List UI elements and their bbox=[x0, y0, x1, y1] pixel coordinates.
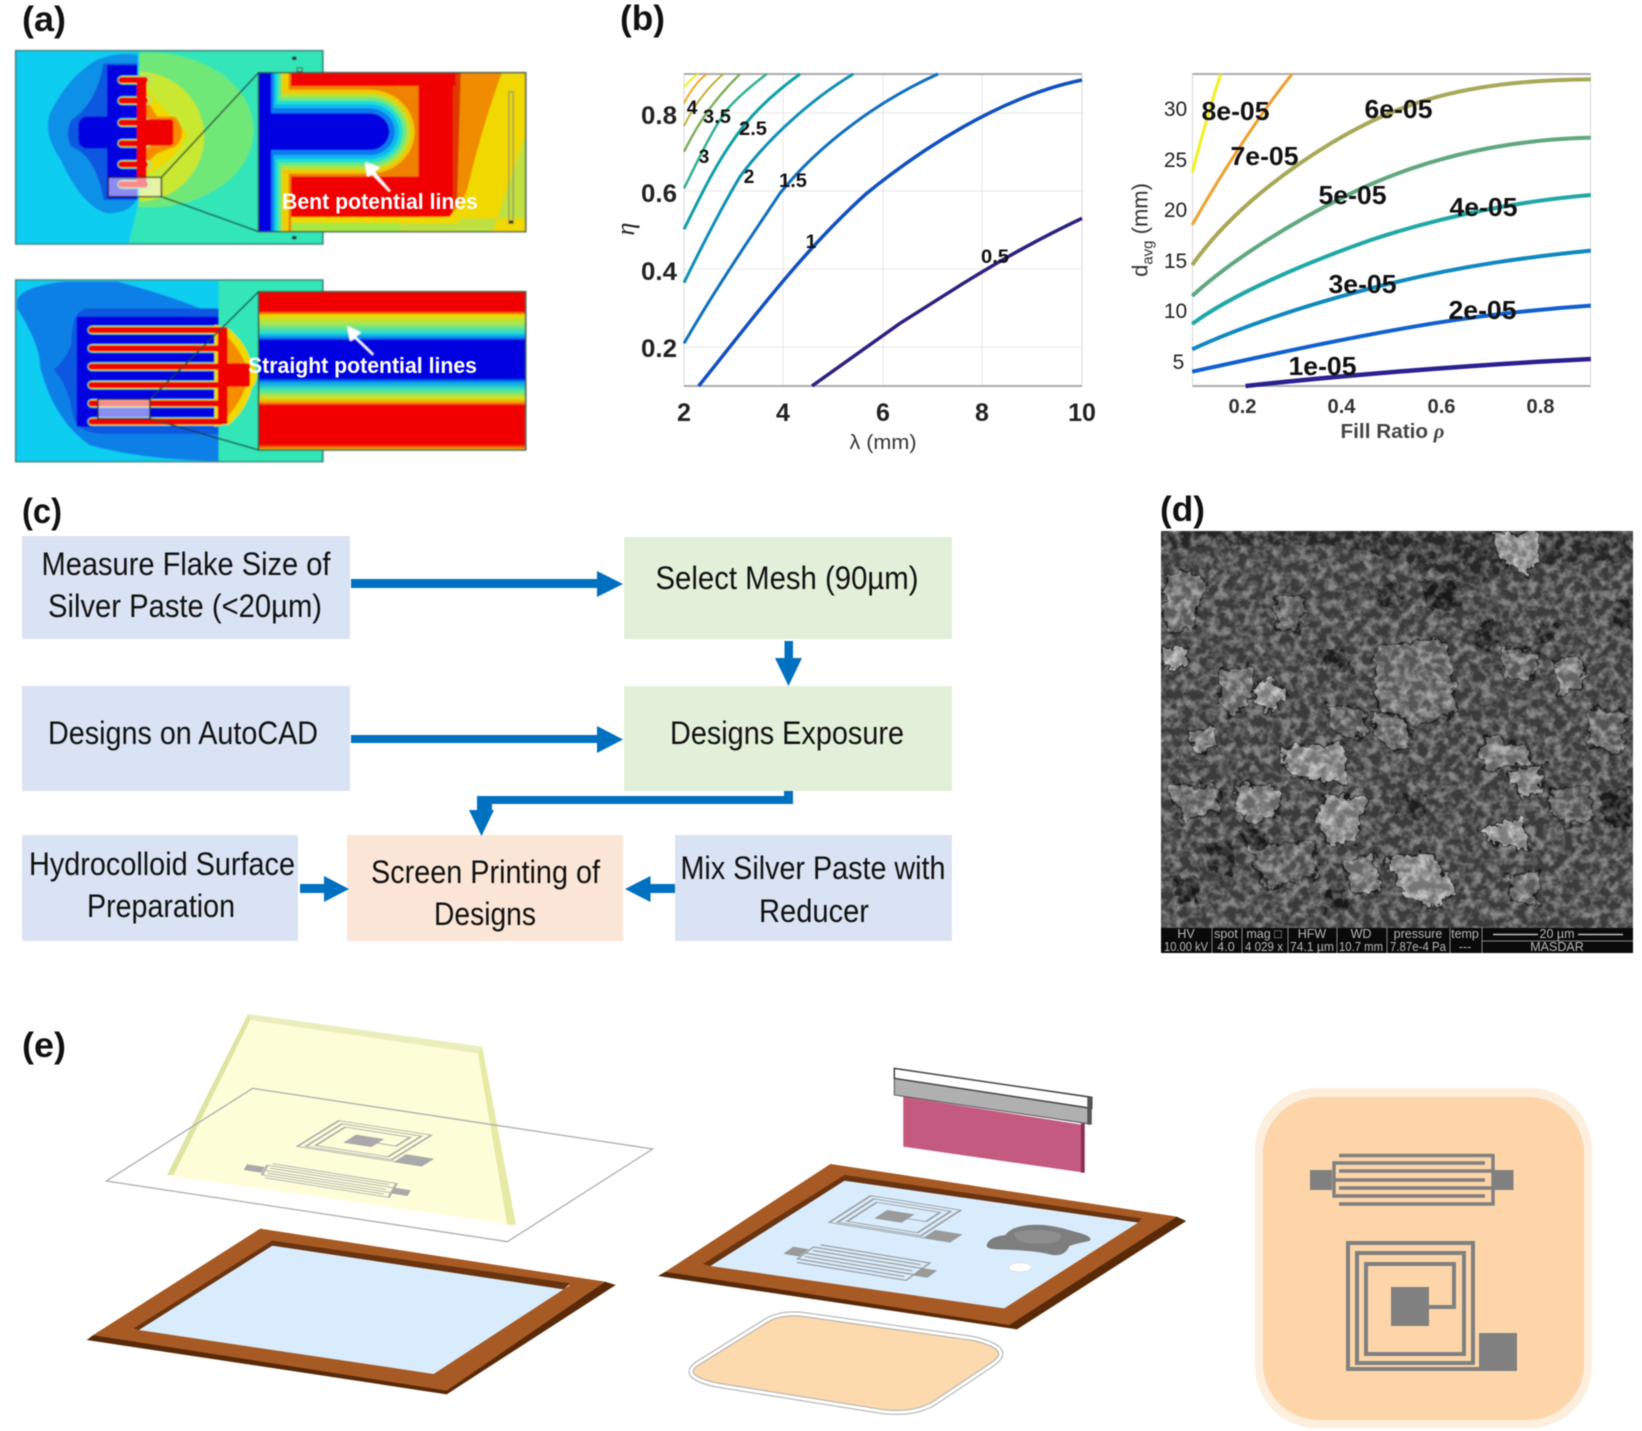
y tick labels: 15 bbox=[1164, 250, 1187, 273]
x tick labels: 0.8 bbox=[1526, 396, 1554, 418]
SEM info bar: 7.87e-4 Pa bbox=[1390, 940, 1446, 954]
transparent mask sheet bbox=[106, 1088, 653, 1242]
SEM info bar: HFW bbox=[1298, 927, 1326, 941]
box: measure flake size: Silver Paste (<20µm) bbox=[48, 588, 322, 624]
panel a label: (a) bbox=[22, 0, 66, 39]
y tick labels: 30 bbox=[1164, 98, 1187, 121]
box: designs on autocad: Designs on AutoCAD bbox=[48, 715, 318, 751]
design on mask: interdigitated bbox=[241, 1160, 413, 1200]
SEM info bar: --- bbox=[1459, 940, 1471, 954]
chart: d_avg vs fill ratio contour plot bbox=[1128, 74, 1591, 443]
illustration: screen frame with designs and paste bbox=[658, 1164, 1186, 1329]
x tick labels: 10 bbox=[1068, 399, 1096, 427]
callout: straight potential lines: Straight potential lines bbox=[248, 353, 477, 378]
contour labels: 3e-05 bbox=[1328, 269, 1396, 299]
y tick labels: 10 bbox=[1164, 300, 1187, 323]
chart: eta vs lambda contour plot bbox=[611, 74, 1096, 454]
contour labels: 5e-05 bbox=[1318, 180, 1386, 210]
arrow: autocad to exposure bbox=[351, 726, 623, 753]
silver paste blob bbox=[987, 1225, 1090, 1272]
contour labels: 1e-05 bbox=[1288, 351, 1356, 381]
SEM info bar: pressure bbox=[1394, 927, 1442, 941]
SEM info bar: 4 029 x bbox=[1245, 940, 1284, 954]
contour labels: 7e-05 bbox=[1230, 141, 1298, 171]
box: screen printing of designs: Designs bbox=[434, 896, 536, 932]
x tick labels: 0.6 bbox=[1428, 396, 1456, 418]
SEM info bar: 10.7 mm bbox=[1339, 940, 1383, 954]
SEM info bar: spot bbox=[1214, 927, 1238, 941]
top simulation main field bbox=[16, 51, 323, 244]
contour labels: 2 bbox=[744, 167, 754, 188]
SEM info bar: mag □ bbox=[1246, 927, 1282, 941]
SEM info bar bbox=[1161, 927, 1633, 954]
box: hydrocolloid surface preparation bbox=[22, 835, 298, 941]
x tick labels: 4 bbox=[776, 399, 790, 427]
box: screen printing of designs: Screen Printing of bbox=[371, 854, 600, 890]
y axis title: (mm) bbox=[1128, 183, 1152, 240]
light trapezoid bbox=[167, 1014, 516, 1225]
arrow: mesh to exposure bbox=[775, 641, 802, 686]
contour labels bbox=[687, 98, 1009, 268]
illustration: UV light exposure through mask bbox=[87, 1014, 653, 1394]
bottom inset field bbox=[259, 292, 526, 450]
panel c label: (c) bbox=[22, 492, 62, 531]
y tick labels: 25 bbox=[1164, 149, 1187, 172]
contour labels: 1.5 bbox=[779, 171, 807, 192]
x tick labels bbox=[677, 399, 1096, 427]
contour labels: 4e-05 bbox=[1450, 192, 1518, 222]
y tick labels: 0.2 bbox=[641, 335, 677, 363]
wooden frame with mesh bbox=[87, 1229, 616, 1394]
illustration: hydrocolloid substrate bbox=[691, 1314, 1001, 1412]
arrow: hydrocolloid to screen printing bbox=[300, 876, 349, 902]
highlight box bottom bbox=[98, 399, 150, 419]
callout: bent potential lines: Bent potential lines bbox=[282, 189, 478, 214]
y tick labels bbox=[1164, 98, 1187, 374]
x tick labels: 0.4 bbox=[1328, 396, 1356, 418]
illustration: printed sensor patch bbox=[1255, 1088, 1592, 1428]
contour labels: 2.5 bbox=[739, 119, 767, 140]
y axis title: d bbox=[1128, 265, 1152, 277]
contour labels: 3.5 bbox=[703, 107, 731, 128]
box: designs exposure: Designs Exposure bbox=[670, 715, 904, 751]
chart: eta vs lambda contour plot: λ (mm) bbox=[850, 432, 916, 454]
contour labels: 8e-05 bbox=[1202, 96, 1270, 126]
y tick labels: 20 bbox=[1164, 199, 1187, 222]
SEM info bar: temp bbox=[1451, 927, 1479, 941]
y axis title: avg bbox=[1140, 240, 1156, 265]
printed interdigitated electrode bbox=[1310, 1156, 1514, 1204]
panel d label: (d) bbox=[1160, 490, 1205, 529]
box: select mesh bbox=[624, 537, 952, 639]
SEM info bar: 74.1 µm bbox=[1290, 940, 1334, 954]
axis titles: Fill Ratio ρ bbox=[1340, 421, 1444, 443]
SEM info bar: HV bbox=[1177, 927, 1195, 941]
panel b label: (b) bbox=[620, 0, 665, 38]
contour labels: 4 bbox=[687, 98, 698, 119]
arrow: bent lines bbox=[366, 163, 389, 191]
contour labels bbox=[1202, 94, 1518, 381]
box: mix silver paste with reducer: Mix Silver Paste with bbox=[680, 850, 946, 886]
arrow: straight lines bbox=[348, 327, 372, 354]
contour labels: 0.5 bbox=[981, 247, 1009, 268]
contour labels: 6e-05 bbox=[1364, 94, 1432, 124]
bottom simulation main field bbox=[16, 280, 323, 462]
illustration: squeegee bbox=[894, 1068, 1092, 1173]
y tick labels: 0.6 bbox=[641, 180, 677, 208]
design on screen: spiral bbox=[829, 1196, 992, 1243]
box: designs on autocad bbox=[22, 686, 350, 791]
box: measure flake size: Measure Flake Size of bbox=[42, 546, 331, 582]
axis titles: η bbox=[611, 223, 640, 235]
SEM info bar: 10.00 kV bbox=[1164, 940, 1209, 954]
x tick labels: 6 bbox=[876, 399, 890, 427]
y tick labels bbox=[641, 102, 677, 363]
panel e label: (e) bbox=[22, 1026, 66, 1065]
SEM info bar: WD bbox=[1351, 927, 1371, 941]
x tick labels bbox=[1228, 396, 1554, 418]
box: screen printing of designs bbox=[347, 835, 623, 941]
box: hydrocolloid surface preparation: Preparation bbox=[87, 888, 235, 924]
box: measure flake size bbox=[22, 536, 350, 639]
x tick labels: 2 bbox=[677, 399, 691, 427]
design on mask: spiral bbox=[297, 1121, 464, 1166]
box: select mesh: Select Mesh (90µm) bbox=[656, 560, 918, 596]
contour labels: 2e-05 bbox=[1448, 295, 1516, 325]
box: mix silver paste with reducer bbox=[675, 835, 952, 941]
SEM info bar: 20 µm bbox=[1540, 927, 1574, 941]
panel: SEM micrograph of silver flakes bbox=[1161, 531, 1633, 954]
box: hydrocolloid surface preparation: Hydrocolloid Surface bbox=[29, 846, 295, 882]
y tick labels: 0.8 bbox=[641, 102, 677, 130]
SEM info bar: MASDAR bbox=[1530, 940, 1584, 954]
arrow: exposure to screen printing bbox=[469, 791, 793, 836]
y tick labels: 5 bbox=[1173, 351, 1184, 374]
flowchart bbox=[22, 536, 952, 941]
zoom lines top bbox=[161, 73, 259, 232]
panel: (a) top simulation with bent potential lines bbox=[16, 51, 526, 462]
SEM info bar: 4.0 bbox=[1217, 940, 1235, 954]
contour labels: 3 bbox=[699, 147, 709, 168]
x tick labels: 0.2 bbox=[1228, 396, 1256, 418]
contour labels: 1 bbox=[806, 232, 817, 253]
printed spiral coil bbox=[1348, 1243, 1517, 1371]
arrow: flake size to mesh bbox=[351, 571, 623, 597]
design on screen: interdigitated bbox=[777, 1242, 944, 1283]
y tick labels: 0.4 bbox=[641, 258, 677, 286]
zoom lines bottom bbox=[150, 292, 259, 450]
box: designs exposure bbox=[624, 686, 952, 791]
top inset field bbox=[259, 73, 526, 232]
highlight box top bbox=[108, 177, 161, 197]
box: mix silver paste with reducer: Reducer bbox=[759, 893, 869, 929]
arrow: mix to screen printing bbox=[625, 876, 675, 902]
x tick labels: 8 bbox=[975, 399, 989, 427]
